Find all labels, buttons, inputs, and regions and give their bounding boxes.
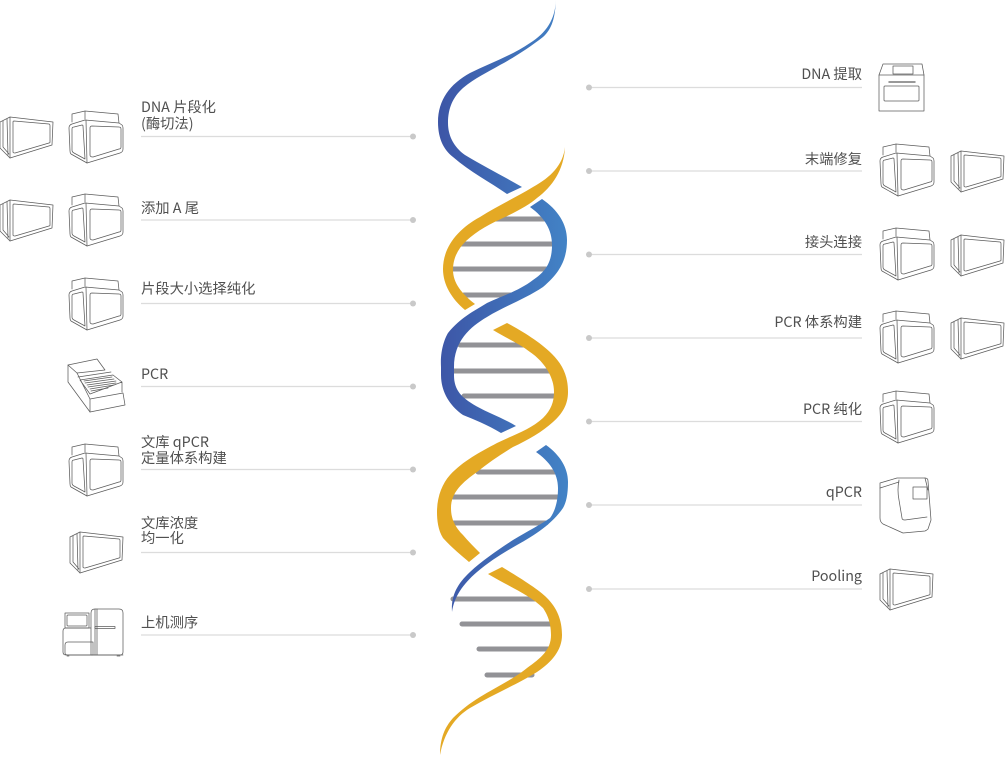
leader line — [586, 335, 862, 341]
leader line — [586, 252, 862, 258]
dna strand: gold lower-middle — [437, 323, 568, 562]
label: 接头连接 — [805, 231, 862, 252]
dna base pair rungs — [452, 219, 558, 675]
label: 添加 A 尾 — [141, 197, 199, 218]
dna strand: blue middle — [441, 199, 567, 433]
icon: small workstation — [880, 569, 933, 610]
icon: small workstation — [0, 200, 53, 241]
left step: library normalisation — [70, 512, 416, 573]
label: 均一化 — [141, 527, 184, 548]
label: 末端修复 — [805, 148, 862, 169]
leader line — [141, 217, 416, 223]
dna strand: blue lower — [452, 445, 568, 612]
dna strand: gold upper — [443, 147, 565, 310]
leader line — [141, 300, 416, 306]
label: (酶切法) — [141, 112, 194, 134]
dna strand: gold bottom — [440, 567, 562, 755]
icon: sequencer — [63, 609, 123, 656]
label: DNA 提取 — [801, 63, 862, 84]
label: PCR — [141, 363, 168, 384]
icon: small workstation — [951, 318, 1004, 359]
dna helix — [437, 0, 568, 755]
icon: large workstation — [880, 311, 934, 363]
left step: size selection — [69, 278, 416, 330]
left step: DNA fragmentation — [0, 96, 416, 163]
icon: small workstation — [951, 235, 1004, 276]
icon: small workstation — [70, 532, 123, 573]
icon: small workstation — [0, 117, 53, 158]
leader line — [141, 134, 416, 140]
right step: PCR setup — [586, 311, 1004, 363]
icon: large workstation — [880, 144, 934, 196]
icon: large workstation — [69, 111, 123, 163]
right step: qPCR — [586, 478, 931, 533]
icon: large workstation — [69, 194, 123, 246]
icon: large workstation — [880, 228, 934, 280]
label: Pooling — [811, 565, 862, 586]
label: PCR 体系构建 — [774, 311, 862, 332]
leader line — [141, 550, 416, 556]
left step: PCR — [68, 359, 416, 412]
leader line — [586, 84, 862, 90]
label: 文库浓度 — [141, 512, 198, 533]
right step: adapter ligation — [586, 228, 1004, 280]
icon: large workstation — [880, 391, 934, 443]
icon: large workstation — [69, 444, 123, 496]
right step: PCR purification — [586, 391, 934, 443]
label: 文库 qPCR — [141, 431, 209, 452]
leader line — [141, 384, 416, 390]
left step: library qPCR setup — [69, 431, 416, 496]
right step: DNA extraction — [586, 63, 924, 111]
leader line — [586, 586, 862, 592]
icon: small workstation — [951, 151, 1004, 192]
label: 定量体系构建 — [141, 447, 227, 468]
leader line — [586, 418, 862, 424]
icon: extractor — [879, 64, 924, 111]
icon: qPCR instrument — [880, 478, 931, 533]
leader line — [141, 466, 416, 472]
label: qPCR — [826, 481, 862, 502]
right step: end repair — [586, 144, 1004, 196]
left step: sequencing — [63, 609, 416, 656]
label: DNA 片段化 — [141, 96, 216, 117]
label: 片段大小选择纯化 — [141, 278, 255, 298]
label: 上机测序 — [141, 612, 198, 632]
left step: A-tailing — [0, 194, 416, 246]
right step: pooling — [586, 565, 933, 610]
label: PCR 纯化 — [803, 398, 862, 419]
icon: large workstation — [69, 278, 123, 330]
dna strand: top blue — [438, 0, 556, 194]
icon: thermal cycler — [68, 359, 125, 412]
leader line — [586, 502, 862, 508]
leader line — [586, 168, 862, 174]
leader line — [141, 632, 416, 638]
